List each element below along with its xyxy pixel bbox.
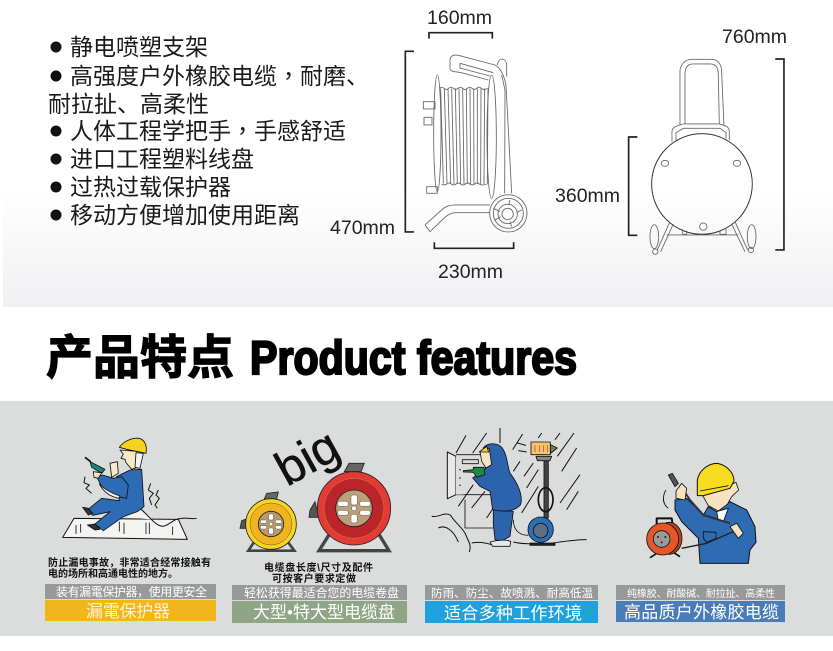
title bar: 高品质户外橡胶电缆 <box>624 603 779 622</box>
panel: product features <box>0 401 833 636</box>
feature 1: leakage protector <box>45 438 216 621</box>
description text: 可按客户要求定做 <box>272 572 356 585</box>
sub-caption bar: 纯橡胶、耐酸碱、耐拉扯、高柔性 <box>627 587 775 600</box>
description text <box>48 556 211 580</box>
illustration: worker in rain <box>432 428 587 552</box>
bullet list: 耐拉扯、高柔性 <box>48 91 209 117</box>
description text: 防止漏电事故，非常适合经常接触有 <box>48 556 211 569</box>
bullet list: 过热过载保护器 <box>70 174 231 200</box>
dimension labels: 360mm <box>555 185 620 207</box>
illustration: worker with cable <box>647 463 756 563</box>
dimension brackets: side view <box>405 33 514 248</box>
title bar: 漏電保护器 <box>86 602 170 621</box>
dimension labels: 470mm <box>330 217 395 239</box>
sub-caption bar: 装有漏電保护器，使用更安全 <box>56 584 207 599</box>
bullet list: 人体工程学把手，手感舒适 <box>70 112 346 146</box>
heading: 产品特点 <box>46 331 234 384</box>
side view diagram <box>423 55 527 232</box>
bullet list: 移动方便增加使用距离 <box>70 202 300 228</box>
feature 2: large reels <box>232 419 407 623</box>
bullet list: 进口工程塑料线盘 <box>70 146 254 172</box>
dimension labels: 230mm <box>438 261 503 283</box>
front view diagram <box>629 59 784 254</box>
sub-caption bar: 轻松获得最适合您的电缆卷盘 <box>244 585 399 600</box>
illustration: red reel <box>309 463 391 551</box>
title bar <box>425 601 598 623</box>
illustration: shocked worker <box>63 438 197 539</box>
feature 3: work environments <box>425 428 598 623</box>
description text: 电的场所和高通电性的地方。 <box>48 567 178 580</box>
description text <box>264 561 373 585</box>
heading: Product features <box>250 331 577 384</box>
heading <box>46 331 577 384</box>
dimension labels: 760mm <box>722 26 787 48</box>
title bar: 适合多种工作环境 <box>444 604 582 623</box>
illustration: yellow reel <box>240 492 296 551</box>
bullet list: 高强度户外橡胶电缆，耐磨、 <box>70 57 369 91</box>
title bar <box>45 600 216 621</box>
dimension labels <box>330 7 787 283</box>
dimension labels: 160mm <box>427 7 492 29</box>
bullet list: 静电喷塑支架 <box>70 34 208 60</box>
description text: 电缆盘长度\尺寸及配件 <box>264 561 373 574</box>
feature 4: rubber cable <box>616 463 785 622</box>
title bar: 大型•特大型电缆盘 <box>253 603 395 622</box>
big label: big <box>267 419 348 497</box>
sub-caption bar: 防雨、防尘、故喷溅、耐高低温 <box>431 586 594 600</box>
panel: specifications <box>3 0 833 307</box>
sub-caption bar <box>616 585 785 600</box>
bullet list <box>48 34 369 228</box>
